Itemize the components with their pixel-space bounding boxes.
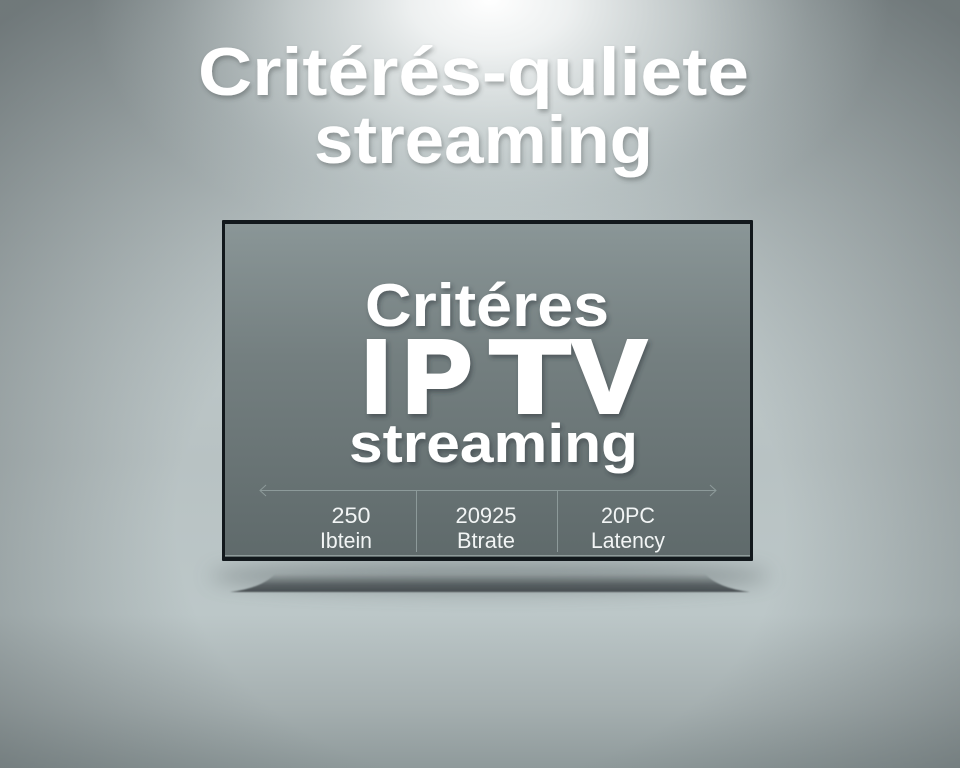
screen heading: IPTV: P xyxy=(403,319,472,434)
screen heading: IPTV: I xyxy=(362,319,391,434)
stat: Latency: 20PC xyxy=(601,503,655,528)
stat: Latency: Latency xyxy=(591,528,665,553)
stat: Ibtein xyxy=(320,503,372,553)
screen shadow xyxy=(210,562,770,592)
panel: TV screen xyxy=(222,220,753,561)
stat: Ibtein: 250 xyxy=(332,503,370,528)
screen heading: streaming: streaming xyxy=(349,412,638,474)
title: Critérés-quliete xyxy=(198,34,749,110)
title xyxy=(198,34,749,178)
arrow: horizontal scale xyxy=(260,485,716,496)
screen heading: IPTV: T xyxy=(490,319,570,434)
screen heading: Critéres: Critéres xyxy=(365,272,609,339)
title: streaming xyxy=(314,102,653,178)
stat: Btrate: 20925 xyxy=(456,503,516,528)
stat: Btrate xyxy=(456,503,516,553)
screen heading: IPTV: V xyxy=(572,319,646,434)
stat: Latency xyxy=(591,503,665,553)
column dividers xyxy=(416,491,558,552)
stat: Ibtein: Ibtein xyxy=(320,528,372,553)
stat: Btrate: Btrate xyxy=(457,528,515,553)
screen heading: IPTV xyxy=(362,319,646,434)
